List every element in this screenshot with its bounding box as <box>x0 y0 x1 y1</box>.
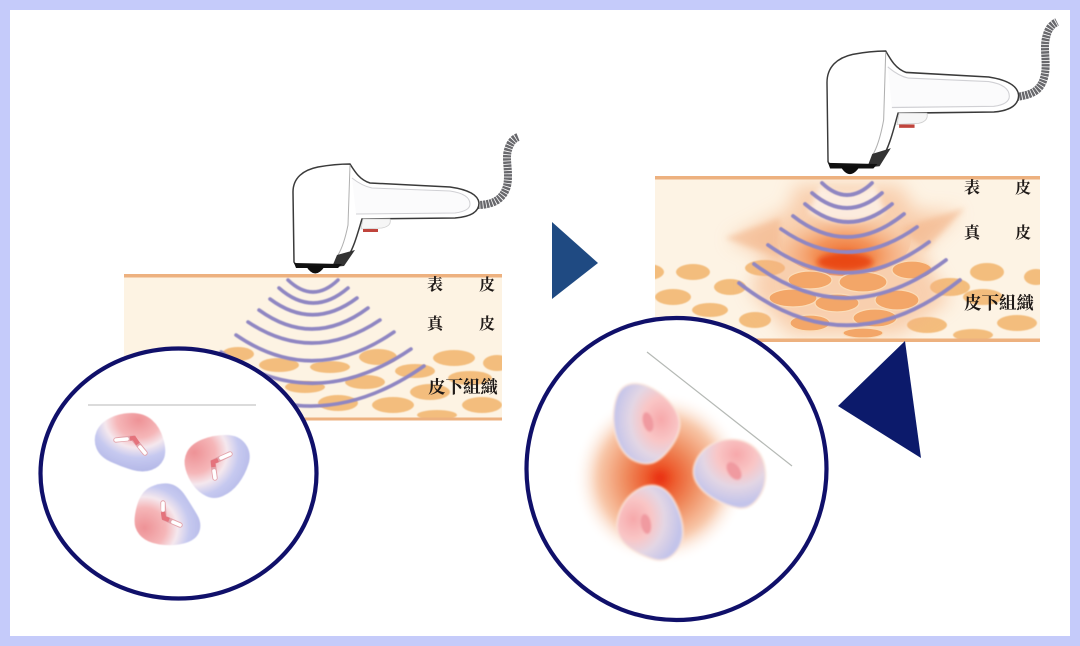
fat cells, right <box>632 260 1048 341</box>
heat glow <box>574 392 746 564</box>
label: subcutaneous tissue: 皮下組織 <box>964 293 1034 313</box>
callout: water molecules vibrating with friction heat <box>526 318 826 620</box>
arrow: right-pointing triangle <box>552 222 598 299</box>
arrow: left-pointing triangle <box>838 341 921 458</box>
label: dermis: 真 <box>964 225 980 242</box>
label: subcutaneous tissue: 皮下組織 <box>428 377 498 397</box>
handpiece cable, left <box>477 137 518 205</box>
molecule 2 <box>693 439 766 508</box>
ultrasound waves, left <box>205 280 424 406</box>
label: epidermis: 表 <box>427 277 443 294</box>
callout: water molecules at rest <box>40 348 316 598</box>
label: dermis: 真 <box>427 316 443 333</box>
molecule 1 <box>95 413 165 472</box>
labels, right skin layers <box>964 178 1034 313</box>
label: dermis: 皮 <box>1015 224 1031 242</box>
molecule 2 <box>185 435 250 498</box>
handpiece, right <box>827 51 1019 174</box>
label: epidermis: 皮 <box>1015 179 1031 197</box>
ultrasound waves, right <box>739 183 960 325</box>
handpiece, left <box>293 164 479 274</box>
labels, left skin layers <box>427 275 498 397</box>
label: epidermis: 表 <box>964 180 980 197</box>
label: dermis: 皮 <box>479 315 495 333</box>
handpiece cable, right <box>1016 22 1057 97</box>
heat zone <box>725 185 965 338</box>
panel: skin cross-section during treatment <box>632 176 1048 342</box>
molecule 3 <box>135 483 200 545</box>
panel: skin cross-section before treatment <box>124 274 511 420</box>
label: epidermis: 皮 <box>479 276 495 294</box>
fat cells, left <box>222 347 511 420</box>
molecule 1 <box>613 384 680 464</box>
molecule 3 <box>617 485 683 560</box>
